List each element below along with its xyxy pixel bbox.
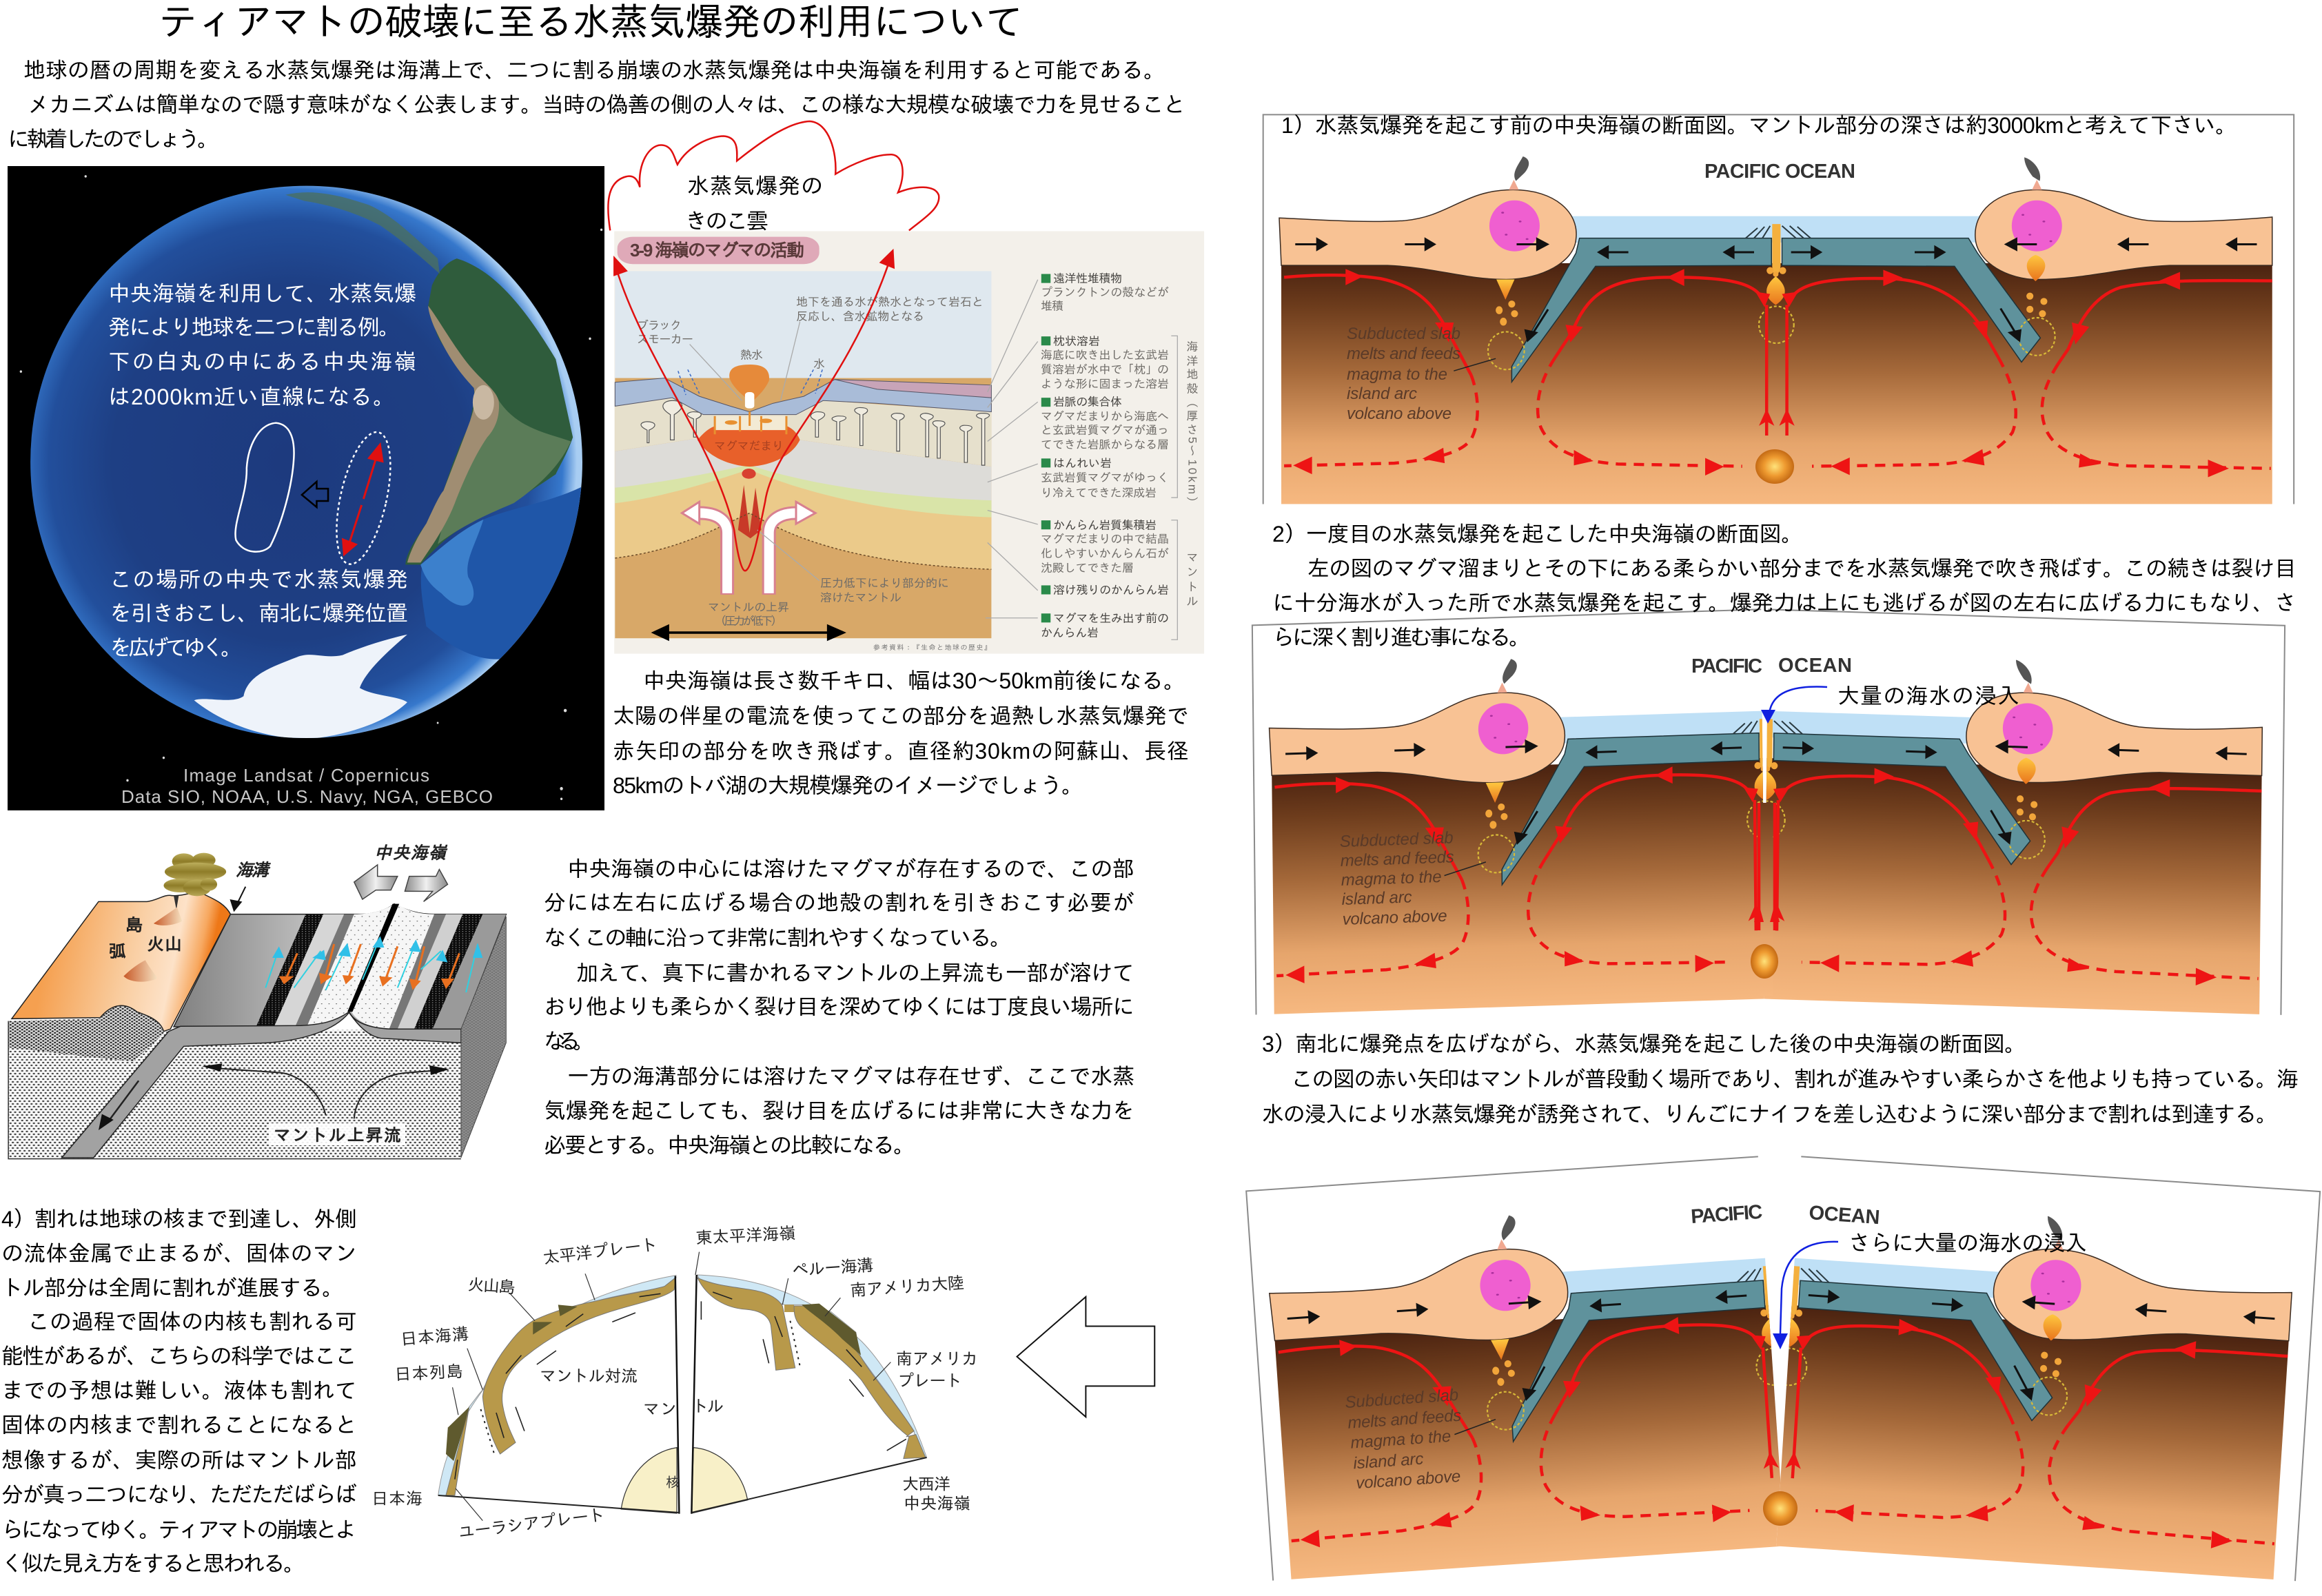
mid paragraph: 必要とする。中央海嶺との比較になる。 — [544, 1133, 915, 1158]
lower left paragraph: く似た見え方をすると思われる。 — [1, 1551, 305, 1576]
earth artwork — [438, 1252, 927, 1521]
block labels — [109, 843, 448, 1145]
globe — [20, 175, 602, 800]
diagram labels: マグマを生み出す前の — [1053, 612, 1169, 625]
mid paragraph — [544, 857, 1134, 1158]
image credit: Data SIO, NOAA, U.S. Navy, NGA, GEBCO — [121, 786, 493, 807]
intro text: メカニズムは簡単なので隠す意味がなく公表します。当時の偽善の側の人々は、この様な大規模な破壊で力を見せること — [28, 92, 1185, 117]
diagram labels: 圧力低下により部分的に — [820, 577, 949, 590]
section 2 text — [1272, 522, 2296, 581]
diagram labels: 遠洋性堆積物 — [1053, 272, 1122, 285]
lower left paragraph: の流体金属で止まるが、固体のマン — [1, 1241, 357, 1266]
image credit — [121, 765, 493, 807]
image credit: Image Landsat / Copernicus — [183, 765, 429, 786]
diagram labels: 化しやすいかんらん石が — [1041, 547, 1169, 560]
ocean label: OCEAN — [1809, 1202, 1880, 1229]
mushroom cloud with red arrows — [608, 121, 939, 571]
diagram labels: ような形に固まった溶岩 — [1041, 378, 1169, 391]
slab note: melts and feeds — [1340, 848, 1454, 870]
panel: earth cross-section split — [371, 1224, 978, 1542]
spreading arrows — [354, 865, 447, 901]
slab note: melts and feeds — [1347, 345, 1460, 363]
panel: ridge magma diagram — [614, 232, 1204, 654]
slab note: island arc — [1341, 888, 1412, 909]
ocean label: PACIFIC — [1691, 655, 1762, 677]
cloud outline — [608, 121, 939, 230]
block labels: 中央海嶺 — [374, 843, 448, 863]
earth labels: 日本海 — [371, 1490, 422, 1508]
cloud caption — [685, 174, 823, 234]
earth labels: トル — [692, 1398, 724, 1416]
closing crack below magma chamber — [1760, 803, 1773, 996]
black double arrow — [651, 624, 846, 641]
panel 1: ridge cross-section before explosion — [1263, 113, 2294, 504]
block artwork — [8, 853, 506, 1159]
slab note — [1339, 828, 1456, 929]
section 2 text continued: に十分海水が入った所で水蒸気爆発を起こす。爆発力は上にも逃げるが図の左右に広げる力にもなり、さ — [1272, 591, 2296, 615]
earth labels: 太平洋プレート — [542, 1236, 658, 1268]
blue callout: さらに大量の海水の浸入 — [1849, 1231, 2087, 1256]
slab note: magma to the — [1341, 868, 1442, 890]
magma ball — [1763, 1491, 1797, 1526]
globe captions — [108, 281, 416, 660]
block labels: 弧 — [109, 942, 126, 961]
red double arrow — [342, 442, 384, 556]
lower left paragraph: 想像するが、実際の所はマントル部 — [1, 1448, 357, 1473]
lower left paragraph — [1, 1207, 357, 1576]
section 2 text: 左の図のマグマ溜まりとその下にある柔らかい部分までを水蒸気爆発で吹き飛ばす。この続きは裂け目 — [1307, 556, 2296, 581]
earth labels: 中央海嶺 — [904, 1495, 970, 1513]
intro text — [8, 58, 1185, 152]
intro text: 地球の暦の周期を変える水蒸気爆発は海溝上で、二つに割る崩壊の水蒸気爆発は中央海嶺を利用すると可能である。 — [23, 58, 1165, 83]
section 3 text — [1262, 1032, 2299, 1127]
diagram labels: プランクトンの殻などが — [1041, 286, 1169, 299]
earth labels: 南アメリカ — [896, 1350, 978, 1369]
slab note: volcano above — [1342, 907, 1447, 929]
trench pointer — [230, 887, 245, 912]
slab note: magma to the — [1347, 365, 1447, 384]
earth labels: 大西洋 — [902, 1475, 950, 1494]
ridge paragraph: 85kmのトバ湖の大規模爆発のイメージでしょう。 — [613, 773, 1083, 798]
ridge paragraph: 太陽の伴星の電流を使ってこの部分を過熱し水蒸気爆発で — [613, 704, 1189, 728]
slab note: island arc — [1353, 1449, 1424, 1473]
diagram labels: スモーカー — [637, 333, 693, 346]
diagram labels: 沈殿してできた層 — [1041, 562, 1134, 575]
globe captions: 発により地球を二つに割る例。 — [108, 315, 400, 340]
diagram artwork — [614, 232, 1204, 654]
diagram labels: 堆積 — [1041, 300, 1063, 313]
section 3 text: 3）南北に爆発点を広げながら、水蒸気爆発を起こした後の中央海嶺の断面図。 — [1262, 1032, 2026, 1056]
diagram labels: はんれい岩 — [1053, 457, 1112, 470]
title: ティアマトの破壊に至る水蒸気爆発の利用について — [159, 1, 1023, 43]
magma ball — [1755, 449, 1794, 484]
blue callout — [1761, 684, 2019, 724]
lower left paragraph: 能性があるが、こちらの科学ではここ — [1, 1344, 357, 1369]
diagram labels: 反応し、含水鉱物となる — [796, 310, 924, 323]
earth labels: マントル対流 — [540, 1367, 638, 1386]
lower left paragraph: 分が真っ二つになり、ただただばらば — [1, 1482, 357, 1507]
section 2 text continued — [1272, 591, 2296, 650]
diagram labels: （圧力が低下） — [715, 615, 782, 628]
blue callout — [1773, 1231, 2087, 1349]
lower left paragraph: らになってゆく。ティアマトの崩壊とよ — [1, 1517, 357, 1542]
diagram labels: てできた岩脈からなる層 — [1041, 438, 1169, 451]
ocean label: OCEAN — [1778, 655, 1852, 677]
panel: plate tectonics block diagram — [8, 843, 506, 1159]
ridge paragraph: 中央海嶺は長さ数千キロ、幅は30～50km前後になる。 — [643, 668, 1185, 693]
globe captions: を広げてゆく。 — [110, 635, 243, 660]
diagram labels: 海洋地殻（厚さ5～10km） — [1185, 340, 1199, 510]
section 3 text: 水の浸入により水蒸気爆発が誘発されて、りんごにナイフを差し込むように深い部分まで割れは到達する。 — [1262, 1102, 2278, 1127]
dashed ellipse: ridge — [326, 427, 401, 570]
earth labels: 日本列島 — [394, 1362, 463, 1384]
globe captions: は2000km近い直線になる。 — [108, 385, 395, 409]
red eruption arrows — [613, 249, 895, 571]
block labels: 海溝 — [236, 861, 272, 880]
diagram labels: ブラック — [637, 319, 682, 332]
diagram labels: と玄武岩質マグマが通っ — [1041, 424, 1169, 437]
slab note: magma to the — [1350, 1427, 1452, 1453]
section 2 right half — [1764, 608, 2285, 1015]
diagram labels: かんらん岩質集積岩 — [1053, 519, 1157, 532]
cloud caption: きのこ雲 — [685, 209, 768, 234]
diagram labels: 地下を通る水が熱水となって岩石と — [796, 296, 984, 309]
earth labels: ユーラシアプレート — [457, 1506, 606, 1542]
diagram labels: マントルの上昇 — [708, 601, 789, 614]
globe captions: 下の白丸の中にある中央海嶺 — [108, 349, 416, 374]
diagram labels: マグマだまり — [714, 440, 784, 453]
ridge paragraph: 赤矢印の部分を吹き飛ばす。直径約30kmの阿蘇山、長径 — [613, 739, 1189, 764]
hollow left arrow — [1017, 1297, 1154, 1417]
slab note: volcano above — [1347, 405, 1452, 423]
diagram labels: 水 — [813, 358, 825, 371]
slab note: Subducted slab — [1345, 1386, 1459, 1412]
diagram labels: 熱水 — [740, 349, 763, 362]
white outline: mid-ocean ridge target — [235, 423, 294, 552]
lower left paragraph: トル部分は全周に割れが進展する。 — [1, 1276, 344, 1300]
diagram labels — [630, 240, 1199, 652]
diagram labels: り冷えてできた深成岩 — [1041, 487, 1157, 500]
slab note — [1345, 1386, 1466, 1493]
slab note: Subducted slab — [1339, 828, 1454, 851]
mid paragraph: 気爆発を起こしても、裂け目を広げるには非常に大きな力を — [544, 1098, 1134, 1123]
intro text: に執着したのでしょう。 — [8, 127, 219, 152]
ocean label — [1691, 655, 1852, 677]
mid paragraph: 一方の海溝部分には溶けたマグマは存在せず、ここで水蒸 — [567, 1064, 1134, 1089]
diagram labels: 玄武岩質マグマがゆっく — [1041, 471, 1169, 484]
lower left paragraph: までの予想は難しい。液体も割れて — [1, 1378, 357, 1403]
slab note: Subducted slab — [1347, 325, 1460, 343]
earth labels: プレート — [897, 1372, 962, 1391]
earth labels: 南アメリカ大陸 — [850, 1273, 965, 1300]
panel 3: ridge cross-section with opened wedge — [1246, 1122, 2320, 1581]
diagram labels: マグマだまりから海底へ — [1041, 410, 1169, 423]
block labels: 島 — [125, 916, 143, 935]
section 1 heading: 1）水蒸気爆発を起こす前の中央海嶺の断面図。マントル部分の深さは約3000kmと考えて下さい。 — [1281, 113, 2237, 138]
section 2 text continued: らに深く割り進む事になる。 — [1272, 625, 1531, 650]
earth labels: マン — [643, 1400, 677, 1419]
flow arrows on floor — [265, 939, 478, 992]
earth labels: 日本海溝 — [400, 1324, 469, 1349]
slab note — [1347, 325, 1460, 423]
globe captions: を引きおこし、南北に爆発位置 — [110, 601, 408, 626]
earth labels: 火山島 — [467, 1276, 516, 1298]
panel 2: ridge cross-section after first explosion — [1252, 593, 2285, 1015]
cloud caption: 水蒸気爆発の — [687, 174, 823, 198]
diagram labels: 枕状溶岩 — [1053, 335, 1100, 348]
ocean label: PACIFIC OCEAN — [1704, 161, 1855, 183]
diagram labels: 参考資料：『生命と地球の歴史』 — [873, 644, 991, 652]
lower left paragraph: 4）割れは地球の核まで到達し、外側 — [1, 1207, 357, 1231]
section 1 artwork — [1263, 114, 2294, 504]
diagram labels: 溶けたマントル — [820, 591, 902, 604]
lens magma — [1751, 944, 1778, 979]
diagram labels: 海底に吹き出した玄武岩 — [1041, 349, 1169, 362]
diagram labels: 3-9 海嶺のマグマの活動 — [630, 240, 804, 260]
globe captions: 中央海嶺を利用して、水蒸気爆 — [108, 281, 416, 306]
earth labels: 東太平洋海嶺 — [695, 1224, 796, 1248]
ocean label: PACIFIC — [1690, 1201, 1763, 1228]
ridge paragraph — [613, 668, 1189, 798]
volcano cones — [123, 908, 182, 982]
section 2 text: 2）一度目の水蒸気爆発を起こした中央海嶺の断面図。 — [1272, 522, 1803, 546]
block labels: 火山 — [147, 935, 182, 954]
blue callout: 大量の海水の浸入 — [1837, 684, 2019, 708]
diagram labels: 岩脈の集合体 — [1053, 396, 1122, 409]
diagram labels: マントル — [1185, 551, 1199, 609]
mid paragraph: なくこの軸に沿って非常に割れやすくなっている。 — [544, 925, 1012, 950]
lower left paragraph: この過程で固体の内核も割れる可 — [28, 1309, 357, 1334]
slab note: melts and feeds — [1347, 1406, 1462, 1433]
olive eruption cloud — [164, 853, 226, 896]
hollow left arrow — [302, 482, 328, 507]
diagram labels: 溶け残りのかんらん岩 — [1053, 584, 1169, 597]
block labels: マントル上昇流 — [274, 1126, 401, 1145]
section 3 right half — [1776, 1156, 2321, 1581]
slab note: island arc — [1347, 385, 1417, 403]
ocean label — [1690, 1201, 1880, 1229]
slab note: volcano above — [1356, 1467, 1461, 1493]
diagram labels: マグマだまりの中で結晶 — [1041, 533, 1169, 546]
earth labels — [371, 1224, 978, 1542]
section 3 left half — [1245, 1156, 1781, 1581]
diagram labels: 質溶岩が水中で「枕」の — [1041, 363, 1169, 376]
rising mantle lines — [1754, 803, 1780, 930]
mid paragraph: なる。 — [544, 1029, 595, 1054]
mid paragraph: 分には左右に広げる場合の地殻の割れを引きおこす必要が — [544, 890, 1134, 915]
mid paragraph: 中央海嶺の中心には溶けたマグマが存在するので、この部 — [567, 857, 1134, 881]
mid paragraph: 加えて、真下に書かれるマントルの上昇流も一部が溶けて — [576, 961, 1134, 985]
mantle upwelling arrows — [202, 1063, 449, 1118]
earth labels: 核 — [666, 1475, 680, 1491]
mid paragraph: おり他よりも柔らかく裂け目を深めてゆくには丁度良い場所に — [544, 994, 1134, 1019]
section 3 text: この図の赤い矢印はマントルが普段動く場所であり、割れが進みやすい柔らかさを他よりも持っている。海 — [1291, 1067, 2299, 1092]
diagram labels: かんらん岩 — [1041, 626, 1099, 640]
earth labels: ペルー海溝 — [792, 1256, 874, 1280]
section 2 left half — [1252, 608, 1764, 1014]
panel: globe photo — [8, 166, 604, 810]
globe captions: この場所の中央で水蒸気爆発 — [110, 567, 408, 592]
lower left paragraph: 固体の内核まで割れることになると — [1, 1413, 357, 1438]
